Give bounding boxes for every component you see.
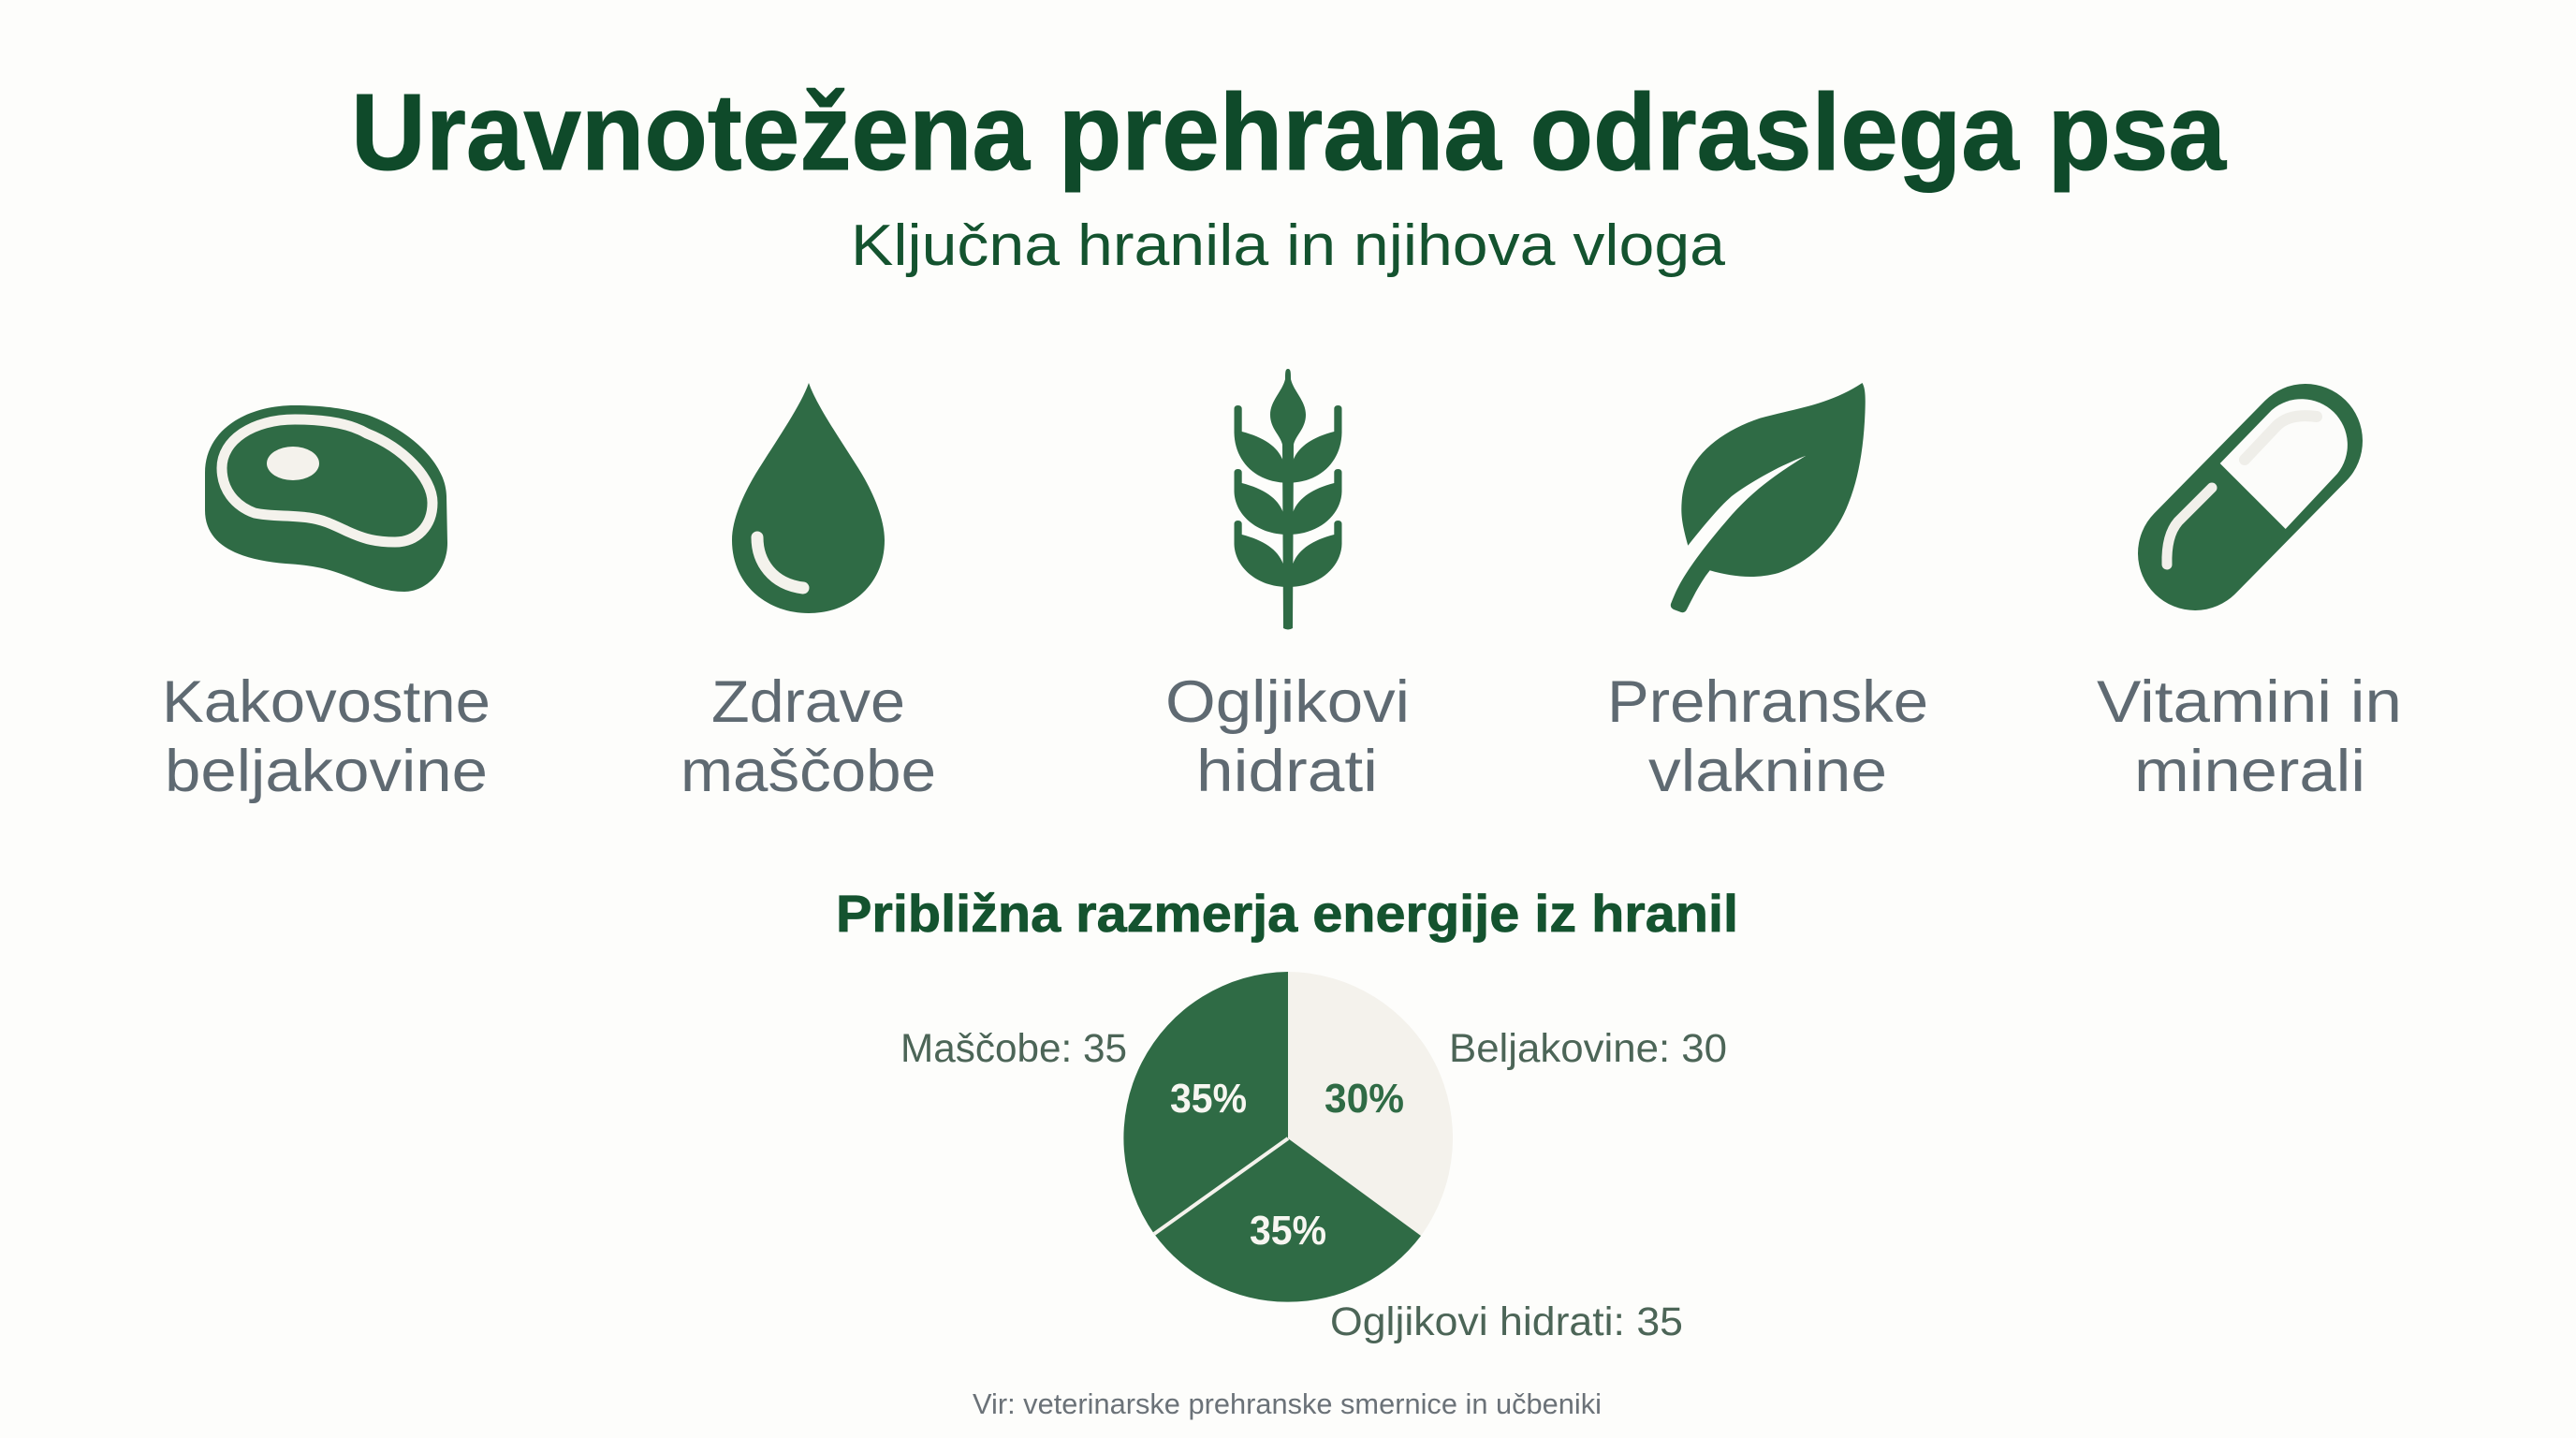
pie chart — [1123, 972, 1453, 1302]
value: 35% left: 35% — [1170, 1076, 1247, 1122]
label: Prehranske vlaknine — [1607, 669, 1928, 804]
pie label: Beljakovine: Beljakovine: 30 — [1449, 1026, 1727, 1071]
label: Ogljikovi hidrati: Ogljikovi — [1165, 669, 1410, 735]
icon: meat — [205, 405, 447, 592]
icon: leaf — [1671, 383, 1866, 612]
label: Zdrave maščobe: maščobe — [681, 739, 936, 804]
label: Vitamini in minerali: minerali — [2134, 739, 2365, 804]
label: Ogljikovi hidrati: hidrati — [1196, 739, 1378, 804]
source note: Vir: veterinarske prehranske smernice in učbeniki — [973, 1387, 1602, 1420]
icon: wheat — [1234, 369, 1342, 629]
label: Zdrave maščobe: Zdrave — [711, 669, 905, 735]
label: Vitamini in minerali — [2097, 669, 2402, 804]
label: Zdrave maščobe — [681, 669, 936, 804]
chart heading: Približna razmerja energije iz hranil — [836, 884, 1738, 943]
value: 30%: 30% — [1325, 1076, 1404, 1122]
slice: Maščobe 35% — [1123, 972, 1288, 1234]
label: Prehranske vlaknine: Prehranske — [1607, 669, 1928, 735]
label: Vitamini in minerali: Vitamini in — [2097, 669, 2402, 735]
icon: oil drop — [732, 383, 885, 613]
label: Kakovostne beljakovine — [162, 669, 490, 804]
subtitle: Ključna hranila in njihova vloga — [851, 213, 1726, 278]
slice: Beljakovine 30% — [1288, 972, 1453, 1236]
icon: capsule — [2167, 399, 2348, 565]
label: Ogljikovi hidrati — [1165, 669, 1410, 804]
label: Prehranske vlaknine: vlaknine — [1648, 739, 1887, 804]
pie label: Ogljikovi hidrati: Ogljikovi hidrati: 35 — [1330, 1299, 1683, 1344]
label: Kakovostne beljakovine: Kakovostne — [162, 669, 490, 735]
title: Uravnotežena prehrana odraslega psa — [351, 71, 2227, 193]
slice: Ogljikovi hidrati 35% — [1154, 1138, 1421, 1302]
pie label: Maščobe: Maščobe: 35 — [900, 1026, 1127, 1071]
label: Kakovostne beljakovine: beljakovine — [165, 739, 488, 804]
value: 35% bottom: 35% — [1250, 1208, 1326, 1254]
